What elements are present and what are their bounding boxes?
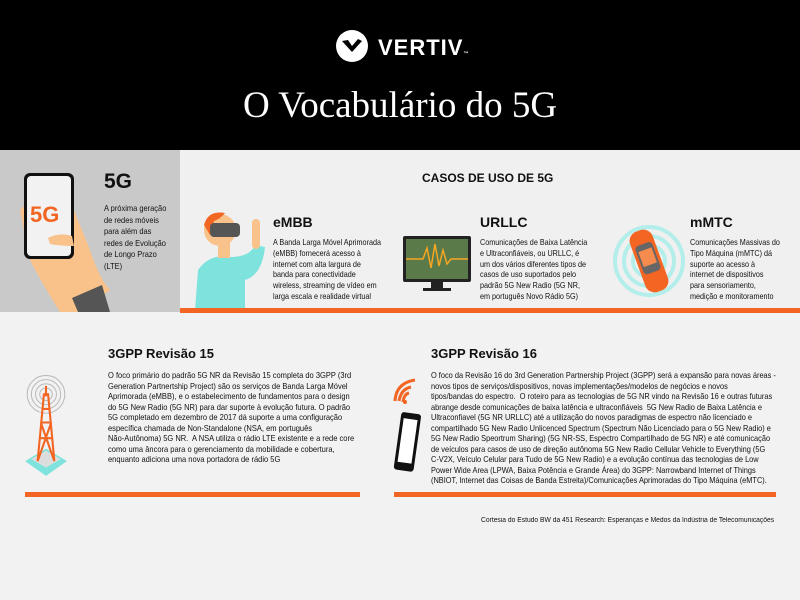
text block: mMTC: suporte ao acesso à <box>690 259 755 269</box>
text block: eMBB: banda para conectividade <box>273 269 356 279</box>
text block: mMTC: Comunicações Massivas do <box>690 237 780 247</box>
text: 5G description: A próxima geração <box>104 203 166 213</box>
text: 5G description: para além das <box>104 226 151 236</box>
text: Revisão 16 body: Ultraconfiavel (5G NR URLLC) até a utilização do novos paradigmas de espectro não licenciado e <box>431 412 752 422</box>
text: Revisão 15 body: enquanto adiciona uma nova portadora de rádio 5G <box>108 454 280 464</box>
text: Revisão 15 body: 5G completado em dezembro de 2017 dá suporte a uma configuração <box>108 412 342 422</box>
text: Revisão 16 body <box>431 370 776 485</box>
text: 5G description: redes de Evolução <box>104 238 166 248</box>
text: Revisão 15 body: como uma âncora para o gerenciamento da mobilidade e cobertura, <box>108 444 335 454</box>
text block: eMBB <box>273 214 381 301</box>
text: Revisão 16 body: compartilhado 5G New Radio Unlicenced Spectrum (Spectrum Não Licenciado para o 5G New Radio) e <box>431 422 771 432</box>
icon: phone in hand: 5G <box>30 202 59 227</box>
text: 5G description: de Longo Prazo <box>104 249 157 259</box>
panel: 3GPP Revisão 16 <box>394 346 776 497</box>
text: 5G description: de redes móveis <box>104 214 159 224</box>
logo <box>336 30 469 62</box>
text: Revisão 16 body: tipos/bandas do espectro. O roteiro para as tecnologias de 5G NR vindo na Revisão 16 e outras futuras <box>431 391 772 401</box>
text block: URLLC: Comunicações de Baixa Latência <box>480 237 587 247</box>
text: Revisão 16 body: (NBIOT, Internet das Coisas de Banda Estreita)/Comunicações Aprimoradas do Tipo Máquina (eMTC). <box>431 475 767 485</box>
icon: car with signal <box>613 225 685 297</box>
text block: URLLC <box>480 214 588 301</box>
title: O Vocabulário do 5G <box>243 85 557 126</box>
text block: eMBB: eMBB <box>273 214 313 230</box>
text block: eMBB: A Banda Larga Móvel Aprimorada <box>273 237 381 247</box>
icon: wifi and phone <box>394 378 421 472</box>
panel: 5G <box>0 150 180 312</box>
footer credit: Cortesia do Estudo BW da 451 Research: Esperanças e Medos da Indústria de Telecomunicações <box>481 517 774 524</box>
icon: tower <box>25 374 67 476</box>
text block: mMTC: internet de dispositivos <box>690 269 763 279</box>
text: Revisão 16 body: Power Wide Area (LPWA, Baixa Potência e Grande Área) do 3GPP: Narrowband Internet of Things <box>431 464 756 474</box>
text block: mMTC: medição e monitoramento <box>690 291 774 301</box>
text block: URLLC: URLLC <box>480 214 527 230</box>
text: Revisão 15 body: Não-Autônoma) 5G NR. A NSA utiliza o rádio LTE existente e a rede core <box>108 433 354 443</box>
header <box>0 0 800 150</box>
heading: Revisão 16: 3GPP Revisão 16 <box>431 346 537 361</box>
text block: eMBB: wireless, streaming de vídeo em <box>273 280 377 290</box>
text: Revisão 16 body: de veículos para casos de uso de direção autônoma 5G New Radio Cellular Vehicle to Everything (5G <box>431 444 765 454</box>
text: Revisão 16 body: 5G New Radio Speortrum Sharing) (5G NR-SS, Espectro Compartilhado de 5G NR) e até comunicação <box>431 433 770 443</box>
text: Revisão 15 body: O foco primário do padrão 5G NR da Revisão 15 completa do 3GPP (3rd <box>108 370 351 380</box>
logo: VERTIV™ <box>378 35 469 60</box>
panel: 3GPP Revisão 15 <box>25 346 360 497</box>
text: Revisão 16 body: abrange desde comunicações de baixa latência e ultraconfiáveis 5G New Radio de Baixa Latência e <box>431 402 762 412</box>
text block: URLLC: um dos vários diferentes tipos de <box>480 259 586 269</box>
text: Revisão 16 body: O foco da Revisão 16 do 3rd Generation Partnership Project (3GPP) será a expansão para novas áreas - <box>431 370 776 380</box>
text block: eMBB: (eMBB) fornecerá acesso à <box>273 248 361 258</box>
text block: mMTC: para sensoriamento, <box>690 280 756 290</box>
panel: casos de uso <box>180 150 800 312</box>
text: Revisão 15 body: Aprimorada (eMBB), e o estabelecimento de fundamentos para o design <box>108 391 350 401</box>
icon: monitor <box>403 236 471 291</box>
text: Revisão 16 body: novos tipos de serviços/dispositivos, novas implementações/modelos de negócios e novos <box>431 380 728 390</box>
text: Revisão 15 body: Generation Partnertship Project) são os serviços de Banda Larga Móvel <box>108 380 348 390</box>
text block: mMTC <box>690 214 780 301</box>
icon: phone in hand <box>20 173 110 312</box>
heading: casos de uso: CASOS DE USO DE 5G <box>422 171 553 185</box>
text block: eMBB: larga escala e realidade virtual <box>273 291 371 301</box>
text: Revisão 15 body: do 5G New Radio (5G NR) para dar suporte à evolução futura. O padrão <box>108 402 350 412</box>
text block: eMBB: internet com alta largura de <box>273 259 361 269</box>
text: 5G description <box>104 203 166 270</box>
icon: VR person <box>195 212 265 308</box>
text block: mMTC: Tipo Máquina (mMTC) dá <box>690 248 772 258</box>
text: Revisão 16 body: C-V2X, Veículo Celular para Tudo de 5G New Radio) e a evolução contínua das tecnologias de Low <box>431 454 759 464</box>
heading: Revisão 15: 3GPP Revisão 15 <box>108 346 214 361</box>
text block: URLLC: padrão 5G New Radio (5G NR, <box>480 280 580 290</box>
text block: mMTC: mMTC <box>690 214 733 230</box>
text block: URLLC: casos de uso suportados pelo <box>480 269 576 279</box>
heading: 5G: 5G <box>104 170 132 193</box>
text block: URLLC: e Ultraconfiáveis, ou URLLC, é <box>480 248 579 258</box>
text: 5G description: (LTE) <box>104 260 122 270</box>
text: Revisão 15 body <box>108 370 354 464</box>
text block: URLLC: em português Novo Rádio 5G) <box>480 291 578 301</box>
text: Revisão 15 body: específica chamada de Non-Standalone (NSA, em português <box>108 422 312 432</box>
